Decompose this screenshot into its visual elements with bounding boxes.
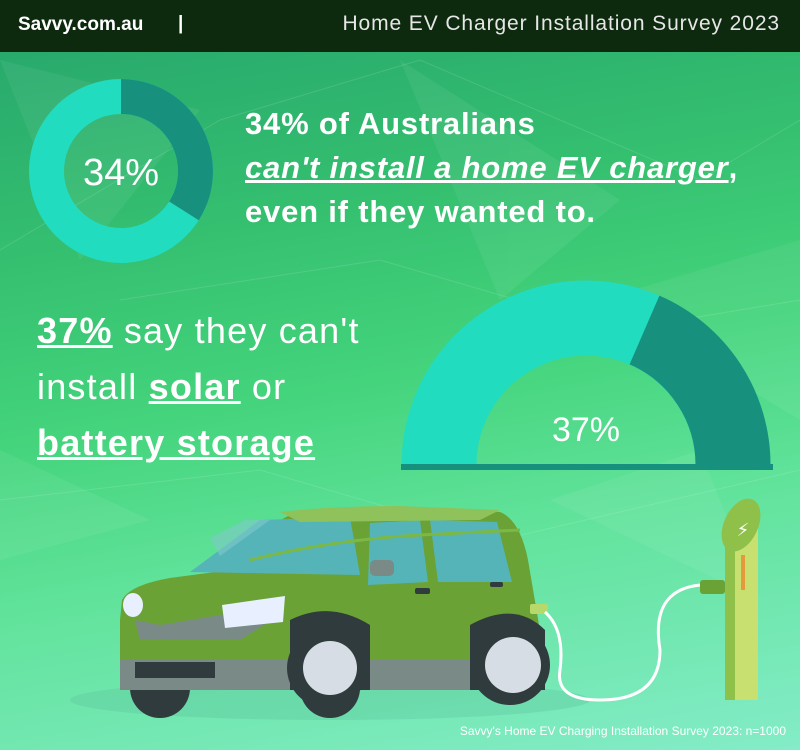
headline text [245, 106, 738, 229]
donut chart 34%: 34% [83, 152, 159, 194]
header bar [0, 0, 800, 52]
headline text: 34% of Australians [245, 106, 536, 141]
charger post [700, 492, 768, 700]
headline text: can't install a home EV charger, [245, 150, 738, 185]
charger post: ⚡ [737, 520, 749, 541]
site name: Savvy.com.au [18, 14, 143, 35]
header title: Home EV Charger Installation Survey 2023 [342, 12, 780, 35]
semicircle gauge 37% [401, 280, 773, 470]
cable [545, 585, 700, 700]
semicircle gauge 37%: 37% [552, 411, 620, 449]
car [120, 506, 550, 718]
footnote: Savvy's Home EV Charging Installation Survey 2023: n=1000 [460, 724, 786, 738]
solar statement: 37% say they can't [37, 310, 360, 351]
donut chart 34% [29, 79, 213, 263]
solar statement [37, 310, 360, 463]
headline text: even if they wanted to. [245, 194, 596, 229]
solar statement: install solar or [37, 366, 286, 407]
solar statement: battery storage [37, 422, 315, 463]
separator: | [178, 13, 183, 34]
